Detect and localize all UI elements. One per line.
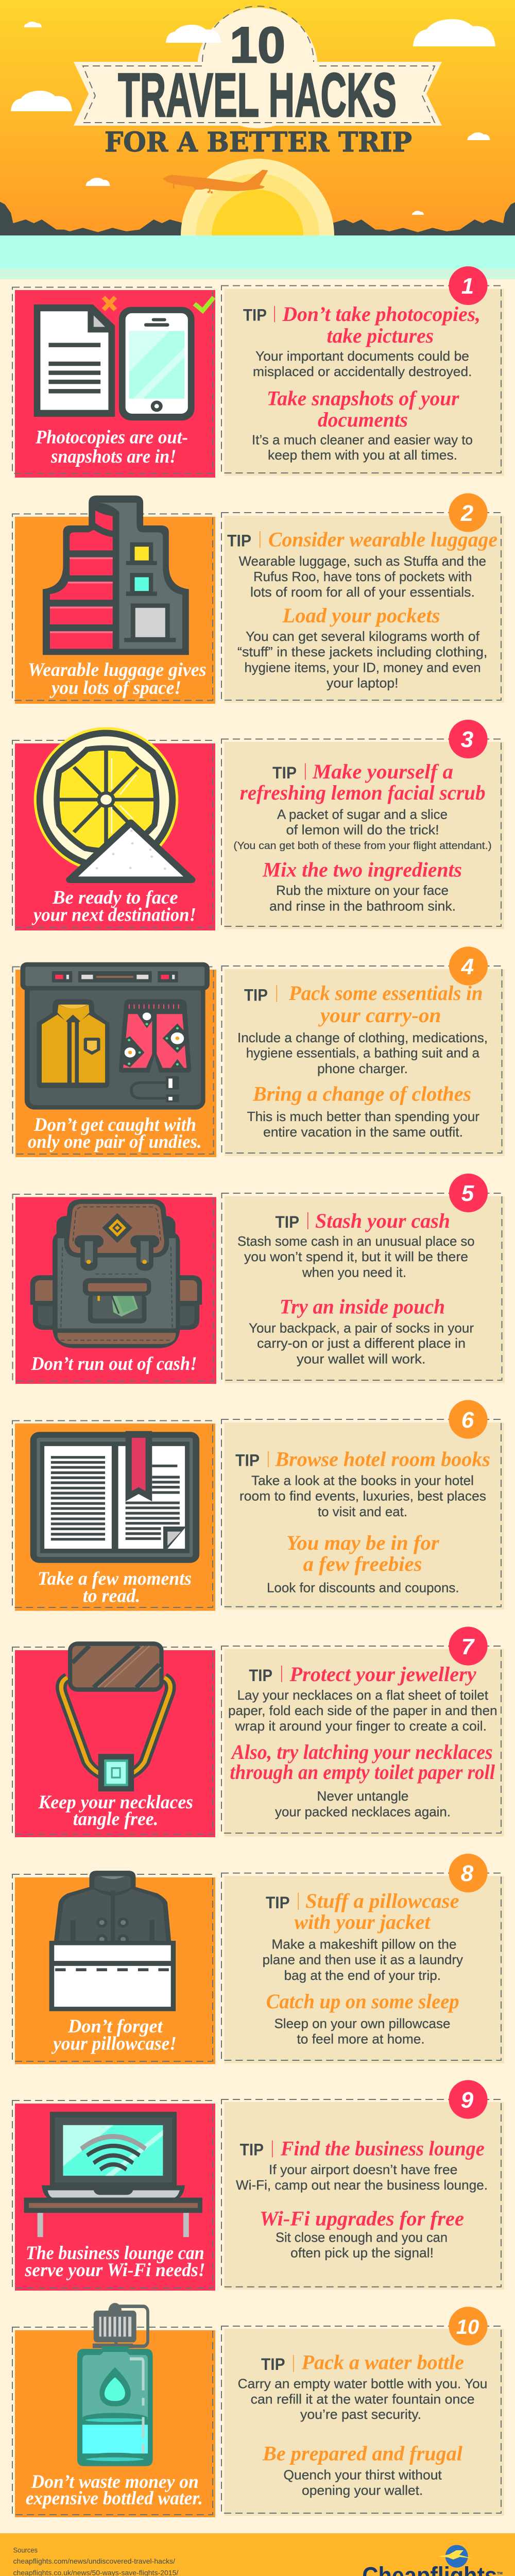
subheading: documents <box>318 408 408 431</box>
body: when you need it. <box>302 1264 406 1280</box>
tip heading: Stuff a pillowcase <box>305 1889 459 1912</box>
body <box>233 806 492 852</box>
body: keep them with you at all times. <box>268 447 457 463</box>
panel: tip 10 image <box>12 2303 215 2517</box>
tip 9: business lounge <box>12 2080 504 2291</box>
body <box>276 2230 448 2260</box>
subtitle: FOR A BETTER TRIP <box>105 127 412 158</box>
panel: tip 6 image <box>12 1421 215 1611</box>
body: often pick up the signal! <box>290 2245 434 2260</box>
icon: backpack <box>30 1199 202 1348</box>
sources <box>13 2546 178 2576</box>
body: Include a change of clothing, medications, <box>237 1030 488 1045</box>
body: Stash some cash in an unusual place so <box>237 1233 475 1249</box>
body: Wearable luggage, such as Stuffa and the <box>239 553 486 569</box>
body: your wallet will work. <box>297 1351 425 1367</box>
body: Sleep on your own pillowcase <box>274 2015 450 2031</box>
caption <box>35 427 188 467</box>
subheading: Try an inside pouch <box>280 1295 445 1318</box>
tip heading: Make yourself a <box>312 760 453 783</box>
body: It’s a much cleaner and easier way to <box>252 432 473 447</box>
panel: tip 3 image <box>12 727 215 930</box>
panel: tip 1 text <box>221 266 504 476</box>
sources: cheapflights.com/news/undiscovered-travel-hacks/ <box>13 2557 175 2565</box>
body: you won’t spend it, but it will be there <box>244 1249 468 1264</box>
tip heading <box>240 760 486 804</box>
body: Take a look at the books in your hotel <box>251 1473 474 1488</box>
subheading: Take snapshots of your <box>267 387 459 410</box>
tip heading: TIP <box>275 1213 299 1231</box>
body: Never untangle <box>317 1788 408 1804</box>
body <box>237 1233 475 1280</box>
caption: expensive bottled water. <box>26 2488 203 2509</box>
body: can refill it at the water fountain once <box>251 2391 475 2406</box>
caption <box>51 2016 177 2054</box>
body: of lemon will do the trick! <box>286 822 439 837</box>
number badge <box>449 2080 488 2119</box>
tip heading: with your jacket <box>294 1910 431 1934</box>
body: (You can get both of these from your flight attendant.) <box>233 840 492 852</box>
body: to visit and eat. <box>318 1504 407 1519</box>
tip 8: pillowcase <box>12 1854 504 2064</box>
panel: tip 9 image <box>12 2100 215 2291</box>
panel: tip 2 text <box>221 493 504 703</box>
caption <box>28 659 206 699</box>
panel: tip 8 image <box>12 1871 215 2064</box>
body: your packed necklaces again. <box>275 1804 451 1819</box>
tip heading: Don’t take photocopies, <box>282 302 480 326</box>
number badge: 6 <box>461 1408 474 1433</box>
rising sun <box>181 159 334 235</box>
tip heading: TIP <box>261 2355 285 2374</box>
number badge: 8 <box>461 1861 474 1886</box>
number badge <box>449 1174 488 1212</box>
body: opening your wallet. <box>302 2482 423 2498</box>
icon: wearable luggage vest <box>43 496 189 655</box>
body: If your airport doesn’t have free <box>269 2162 457 2177</box>
body <box>252 432 473 463</box>
panel: tip 5 text <box>221 1174 505 1383</box>
caption <box>38 1568 192 1606</box>
caption: snapshots are in! <box>50 446 176 467</box>
body: plane and then use it as a laundry <box>263 1952 463 1967</box>
tip 3: lemon scrub <box>12 720 504 930</box>
panel: tip 7 text <box>221 1626 504 1836</box>
body <box>249 1320 474 1367</box>
body: Lay your necklaces on a flat sheet of toilet <box>237 1687 489 1703</box>
body <box>269 883 456 913</box>
panel: tip 4 text <box>221 946 505 1156</box>
tip heading: Pack some essentials in <box>288 981 483 1005</box>
number badge: 3 <box>461 727 473 752</box>
body <box>275 1788 451 1819</box>
caption: Photocopies are out- <box>35 427 188 448</box>
tip 10: water bottle <box>12 2303 504 2517</box>
header scene <box>0 0 515 279</box>
subheading: Catch up on some sleep <box>266 1990 459 2013</box>
panel: tip 9 text <box>221 2080 504 2290</box>
tip heading: Stash your cash <box>315 1209 450 1232</box>
body: hygiene essentials, a bathing suit and a <box>246 1045 480 1061</box>
panel: tip 10 text <box>221 2307 504 2516</box>
tip heading <box>243 302 480 347</box>
subheading: You may be in for <box>286 1531 439 1554</box>
panel: tip 1 image <box>12 287 215 478</box>
body <box>274 2015 450 2046</box>
caption: serve your Wi-Fi needs! <box>25 2260 205 2281</box>
body: Rub the mixture on your face <box>276 883 449 898</box>
icon: water bottle <box>77 2303 153 2466</box>
tip heading: TIP <box>235 1451 260 1469</box>
icon: laptop with wifi <box>24 2112 202 2237</box>
subheading <box>267 387 459 431</box>
body <box>228 1687 497 1734</box>
caption <box>31 887 196 925</box>
body <box>237 1030 488 1076</box>
tip 7: jewellery <box>12 1626 504 1837</box>
body: entire vacation in the same outfit. <box>263 1124 463 1140</box>
tip 5: stash cash <box>12 1174 505 1384</box>
caption: Don’t run out of cash! <box>31 1353 197 1375</box>
body: Your important documents could be <box>255 348 469 364</box>
caption: Be ready to face <box>52 887 178 908</box>
subheading: Load your pockets <box>282 604 440 627</box>
number badge: 1 <box>461 274 474 299</box>
sources: Sources <box>13 2546 38 2554</box>
body: and rinse in the bathroom sink. <box>269 898 456 913</box>
body: Sit close enough and you can <box>276 2230 448 2245</box>
mountains <box>0 202 515 235</box>
subheading <box>286 1531 439 1575</box>
body: your laptop! <box>327 675 399 690</box>
body <box>263 1937 463 1983</box>
subheading: Bring a change of clothes <box>252 1082 471 1106</box>
body: Rufus Roo, have tons of pockets with <box>253 569 472 584</box>
subheading: through an empty toilet paper roll <box>230 1760 495 1784</box>
body <box>237 629 487 690</box>
icon: necklace <box>61 1641 170 1791</box>
tip heading: refreshing lemon facial scrub <box>240 781 486 804</box>
body: carry-on or just a different place in <box>257 1335 466 1351</box>
caption: Don’t waste money on <box>31 2471 199 2493</box>
number badge <box>449 2307 488 2346</box>
body: paper, fold each side of the paper in and then <box>228 1703 497 1718</box>
body: wrap it around your finger to create a coil. <box>235 1718 487 1734</box>
panel: tip 4 image <box>12 962 216 1157</box>
tip heading: Pack a water bottle <box>301 2350 464 2374</box>
logo: cheapflights: TM <box>497 2571 503 2575</box>
caption: Take a few moments <box>38 1568 192 1589</box>
number badge <box>449 1626 488 1666</box>
clouds <box>11 19 495 215</box>
panel: tip 5 image <box>12 1194 216 1384</box>
body: Carry an empty water bottle with you. You <box>238 2376 487 2392</box>
footer <box>0 2533 515 2576</box>
subheading: Mix the two ingredients <box>262 858 462 881</box>
tip 2: wearable luggage <box>12 493 504 704</box>
tip heading: TIP <box>266 1893 289 1912</box>
body: hygiene items, your ID, money and even <box>244 660 481 675</box>
body: misplaced or accidentally destroyed. <box>253 364 472 379</box>
tip heading: TIP <box>244 986 268 1005</box>
icon: open suitcase <box>21 962 210 1110</box>
icon: open book <box>30 1431 199 1563</box>
subheading <box>230 1740 495 1784</box>
title banner <box>74 6 442 130</box>
number badge: 2 <box>460 501 474 526</box>
caption: you lots of space! <box>49 677 181 699</box>
number badge <box>449 493 488 532</box>
panel: tip 8 text <box>221 1854 504 2063</box>
body: “stuff” in these jackets including clothing, <box>237 644 487 659</box>
body: You can get several kilograms worth of <box>246 629 480 644</box>
subheading: Wi-Fi upgrades for free <box>260 2207 464 2230</box>
subheading: Also, try latching your necklaces <box>230 1740 493 1764</box>
number badge: 4 <box>461 954 474 979</box>
number badge: 5 <box>461 1181 474 1206</box>
body <box>239 553 486 600</box>
caption <box>25 2243 205 2281</box>
number badge: 7 <box>461 1634 475 1659</box>
caption: only one pair of undies. <box>28 1131 202 1153</box>
body: Look for discounts and coupons. <box>267 1580 459 1595</box>
number badge: 10 <box>456 2316 479 2338</box>
body: bag at the end of your trip. <box>284 1968 441 1983</box>
tip heading: Find the business lounge <box>280 2137 485 2160</box>
tip heading: take pictures <box>327 324 434 347</box>
caption: your pillowcase! <box>51 2033 177 2054</box>
tip heading: TIP <box>243 306 267 324</box>
number badge <box>449 266 488 305</box>
number badge <box>449 946 488 986</box>
tip heading: TIP <box>240 2141 264 2159</box>
body: phone charger. <box>317 1061 408 1076</box>
tip heading: TIP <box>227 532 251 550</box>
tip heading: Consider wearable luggage <box>268 528 497 551</box>
caption <box>26 2471 203 2509</box>
body <box>238 2376 487 2422</box>
caption: Don’t forget <box>67 2016 163 2037</box>
body <box>239 1473 486 1519</box>
body: lots of room for all of your essentials. <box>250 584 475 600</box>
body <box>253 348 472 379</box>
icon: jacket in pillowcase <box>49 1871 176 2011</box>
caption: Don’t get caught with <box>33 1114 196 1136</box>
icon: document and phone <box>34 297 214 420</box>
body: room to find events, luxuries, best places <box>239 1488 486 1503</box>
caption: your next destination! <box>31 905 196 925</box>
tip heading: Protect your jewellery <box>289 1663 476 1686</box>
body <box>283 2467 442 2498</box>
panel: tip 6 text <box>221 1400 504 1609</box>
caption <box>28 1114 202 1153</box>
subheading: Be prepared and frugal <box>262 2442 463 2465</box>
panel: tip 2 image <box>12 496 215 704</box>
caption: Wearable luggage gives <box>28 659 206 681</box>
sea <box>0 235 515 279</box>
tip 1: photocopies <box>12 266 504 478</box>
tip heading: TIP <box>249 1666 272 1685</box>
logo: cheapflights <box>362 2545 503 2576</box>
panel: tip 3 text <box>221 720 504 929</box>
number badge <box>449 720 488 758</box>
caption: tangle free. <box>73 1809 158 1830</box>
caption: Keep your necklaces <box>38 1792 193 1813</box>
body: Make a makeshift pillow on the <box>271 1937 456 1952</box>
body: you’re past security. <box>300 2406 421 2422</box>
caption <box>38 1792 193 1830</box>
body: Your backpack, a pair of socks in your <box>249 1320 474 1335</box>
tip heading <box>266 1889 459 1934</box>
airplane <box>163 170 268 194</box>
panel: tip 7 image <box>12 1641 215 1837</box>
caption: The business lounge can <box>26 2243 204 2264</box>
body <box>247 1109 479 1140</box>
tip 4: carry-on <box>12 946 505 1157</box>
body <box>236 2162 488 2193</box>
subheading: a few freebies <box>303 1552 422 1575</box>
caption: to read. <box>83 1585 140 1606</box>
body: A packet of sugar and a slice <box>277 806 448 822</box>
body: to feel more at home. <box>297 2031 425 2046</box>
tip heading <box>244 981 483 1027</box>
body: Wi-Fi, camp out near the business lounge. <box>236 2177 488 2193</box>
tip heading: TIP <box>272 764 297 782</box>
tip 6: hotel books <box>12 1400 504 1611</box>
number badge <box>449 1854 488 1892</box>
icon: lemon and sugar <box>34 727 192 880</box>
body: This is much better than spending your <box>247 1109 479 1124</box>
tip heading: Browse hotel room books <box>274 1447 490 1470</box>
tip heading: your carry-on <box>318 1004 441 1027</box>
number badge <box>449 1400 488 1439</box>
number badge: 9 <box>461 2088 474 2113</box>
title: 10: 10 <box>230 16 285 73</box>
body: Quench your thirst without <box>283 2467 442 2483</box>
cloud over banner <box>166 25 221 43</box>
